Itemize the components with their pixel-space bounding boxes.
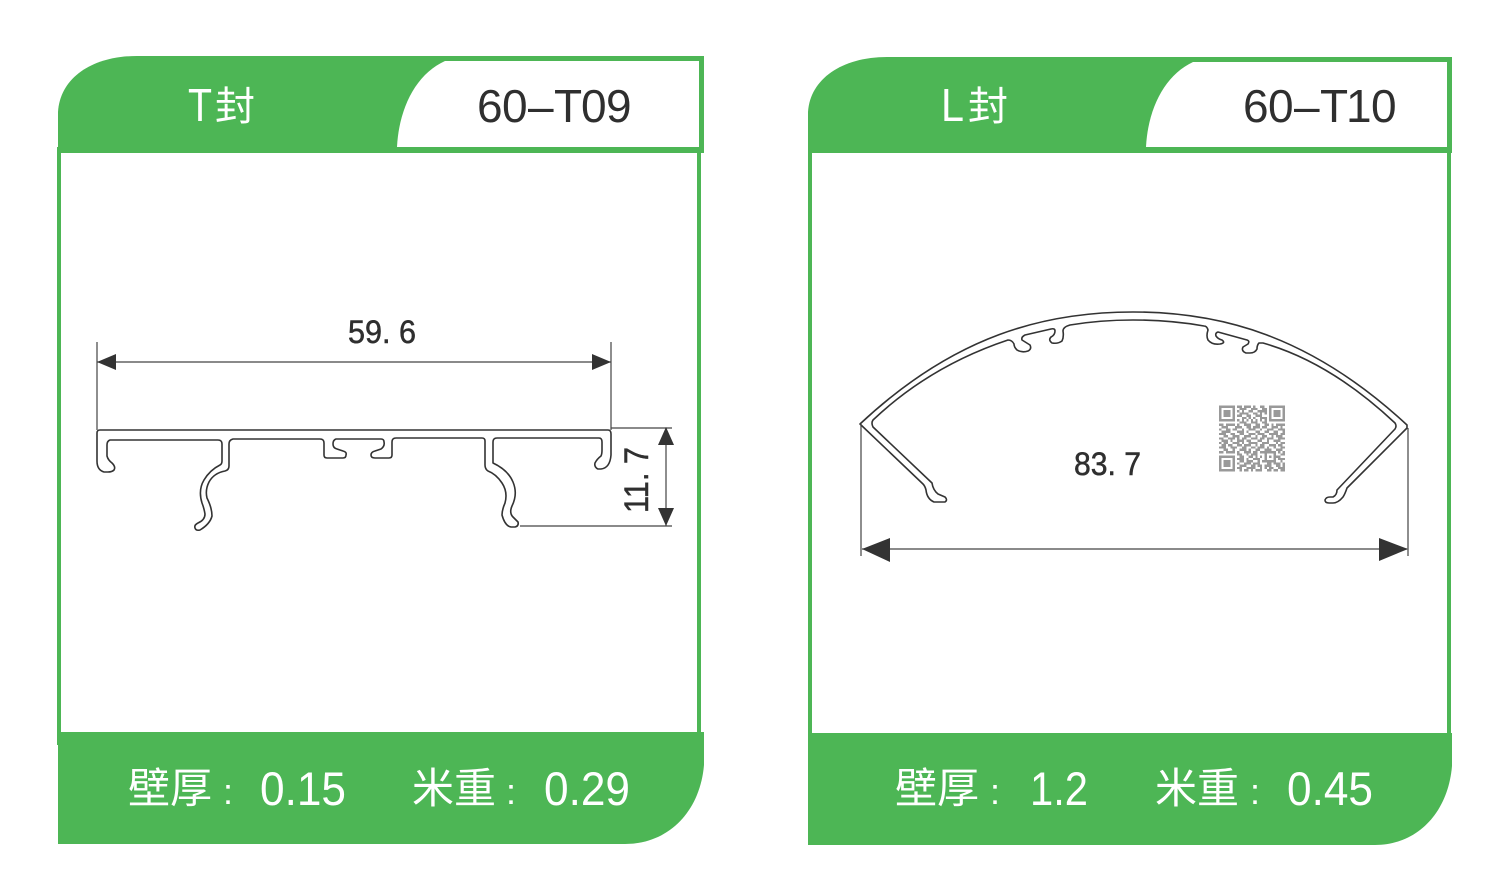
footer specs: 壁厚	[895, 765, 979, 812]
model number box	[397, 61, 699, 147]
profile drawing	[97, 430, 611, 530]
model number: 60–T10	[1243, 80, 1397, 132]
footer specs: :	[990, 771, 1000, 812]
footer specs: :	[223, 771, 233, 812]
heading: T seal: T	[188, 79, 212, 131]
footer specs	[128, 762, 630, 815]
QR code	[1219, 407, 1285, 470]
panel frame	[808, 147, 1451, 745]
heading: L seal	[941, 79, 1008, 131]
heading: T seal: 封	[215, 85, 255, 129]
profile drawing	[860, 312, 1407, 503]
heading: L seal: 封	[968, 85, 1008, 129]
panel: T seal 60-T09	[57, 56, 704, 844]
panel frame	[57, 147, 701, 745]
footer specs: :	[506, 771, 516, 812]
footer band	[58, 732, 704, 844]
footer specs: :	[1250, 771, 1260, 812]
model number: 60–T09	[477, 80, 632, 132]
footer specs: 壁厚	[128, 765, 212, 812]
footer specs	[895, 762, 1373, 815]
header band	[808, 57, 1452, 153]
footer specs: 米重	[412, 765, 496, 812]
footer specs: 0.45	[1287, 762, 1373, 815]
footer specs: 0.29	[544, 762, 630, 815]
footer band	[808, 733, 1452, 845]
footer specs: 米重	[1155, 765, 1239, 812]
width dimension 59.6	[97, 314, 611, 430]
panel: L seal 60-T10	[808, 57, 1452, 845]
footer specs: 0.15	[260, 762, 346, 815]
footer specs: 1.2	[1030, 762, 1088, 815]
width dimension 59.6: 59. 6	[348, 314, 416, 350]
height dimension 11.7	[520, 427, 674, 526]
model number box	[1146, 62, 1447, 147]
heading: L seal: L	[941, 79, 964, 131]
width dimension 83.7: 83. 7	[1074, 446, 1141, 482]
height dimension 11.7: 11. 7	[618, 447, 656, 513]
header band	[58, 56, 704, 153]
width dimension 83.7	[861, 424, 1408, 562]
heading: T seal	[188, 79, 255, 131]
